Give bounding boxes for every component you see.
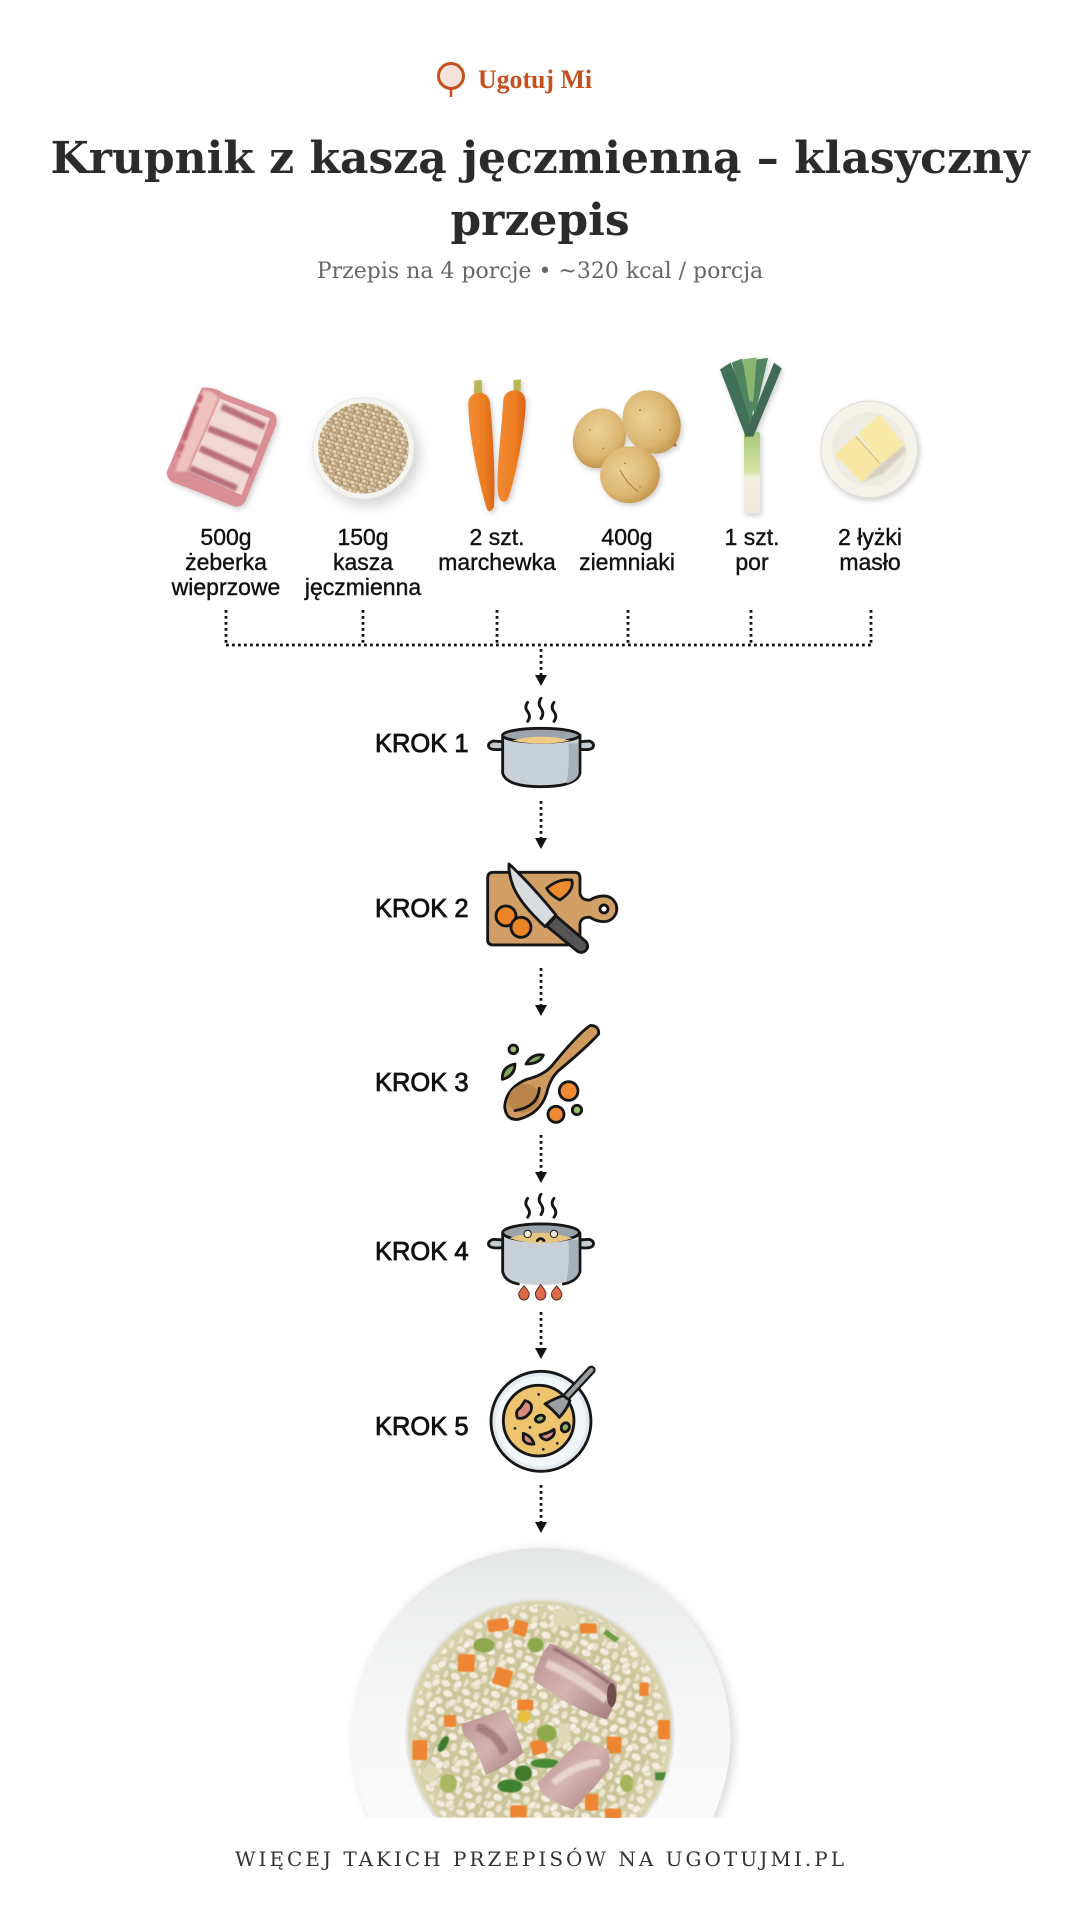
ingredient photo: barley bowl bbox=[313, 398, 414, 499]
photo: finished krupnik plate bbox=[351, 1546, 738, 1818]
label: marchewka: marchewka bbox=[438, 549, 556, 575]
icon: wooden spoon with spices bbox=[502, 1025, 599, 1122]
label: kasza: kasza bbox=[333, 549, 393, 575]
arrow 3 to 4 bbox=[535, 1135, 547, 1183]
title: przepis bbox=[450, 195, 630, 246]
label: masło: 2 łyżki bbox=[838, 524, 902, 550]
footer call to action: WIĘCEJ TAKICH PRZEPISÓW NA UGOTUJMI.PL bbox=[235, 1846, 847, 1871]
plate bbox=[351, 1546, 738, 1818]
arrow into step 1 bbox=[535, 649, 547, 686]
ingredient photo: pork ribs bbox=[167, 388, 277, 506]
vegetables bbox=[413, 1610, 670, 1819]
label: żeberka: żeberka bbox=[185, 549, 267, 575]
dotted connector from ingredients bbox=[226, 610, 872, 645]
icon: cutting board and knife bbox=[488, 864, 617, 952]
step 3 bbox=[375, 1025, 599, 1122]
meat pieces bbox=[462, 1643, 617, 1809]
label: KROK 2: KROK 2 bbox=[375, 895, 469, 923]
label: żeberka: wieprzowe bbox=[171, 574, 280, 600]
ingredient photo: butter on plate bbox=[821, 401, 918, 498]
label: masło: masło bbox=[839, 549, 901, 575]
label: KROK 3: KROK 3 bbox=[375, 1069, 469, 1097]
arrow into final dish bbox=[535, 1485, 547, 1533]
arrow 1 to 2 bbox=[535, 801, 547, 849]
step 1 bbox=[375, 698, 593, 787]
label: KROK 1: KROK 1 bbox=[375, 730, 469, 758]
ingredient photo: leek bbox=[720, 357, 782, 513]
step 5 bbox=[375, 1370, 591, 1471]
title: Krupnik z kaszą jęczmienną – klasyczny bbox=[50, 133, 1031, 184]
arrow 4 to 5 bbox=[535, 1312, 547, 1359]
panel: ingredients bbox=[167, 357, 918, 600]
ingredient photo: potatoes bbox=[565, 380, 692, 510]
icon: pot with steam bbox=[489, 698, 593, 787]
icon: bowl of soup with spoon bbox=[491, 1370, 591, 1471]
logo wordmark: Ugotuj Mi bbox=[478, 65, 592, 94]
label: żeberka: 500g bbox=[200, 524, 252, 550]
label: KROK 5: KROK 5 bbox=[375, 1413, 469, 1441]
label: kasza: 150g bbox=[337, 524, 389, 550]
step 2 bbox=[375, 864, 617, 952]
ingredient photo: carrots bbox=[468, 379, 526, 511]
label: kasza: jęczmienna bbox=[304, 574, 421, 600]
subtitle: Przepis na 4 porcje • ~320 kcal / porcja bbox=[317, 259, 763, 284]
step 4 bbox=[375, 1194, 593, 1300]
label: KROK 4: KROK 4 bbox=[375, 1238, 469, 1266]
icon: logo magnifier spoon bbox=[438, 64, 464, 97]
label: por: 1 szt. bbox=[725, 524, 779, 550]
soup with barley bbox=[405, 1598, 675, 1818]
label: marchewka: 2 szt. bbox=[470, 524, 524, 550]
icon: simmering pot on flames bbox=[489, 1194, 593, 1300]
label: ziemniaki: ziemniaki bbox=[579, 549, 675, 575]
label: ziemniaki: 400g bbox=[601, 524, 653, 550]
arrow 2 to 3 bbox=[535, 968, 547, 1016]
logo: Ugotuj Mi bbox=[438, 64, 592, 97]
label: por: por bbox=[735, 549, 769, 575]
